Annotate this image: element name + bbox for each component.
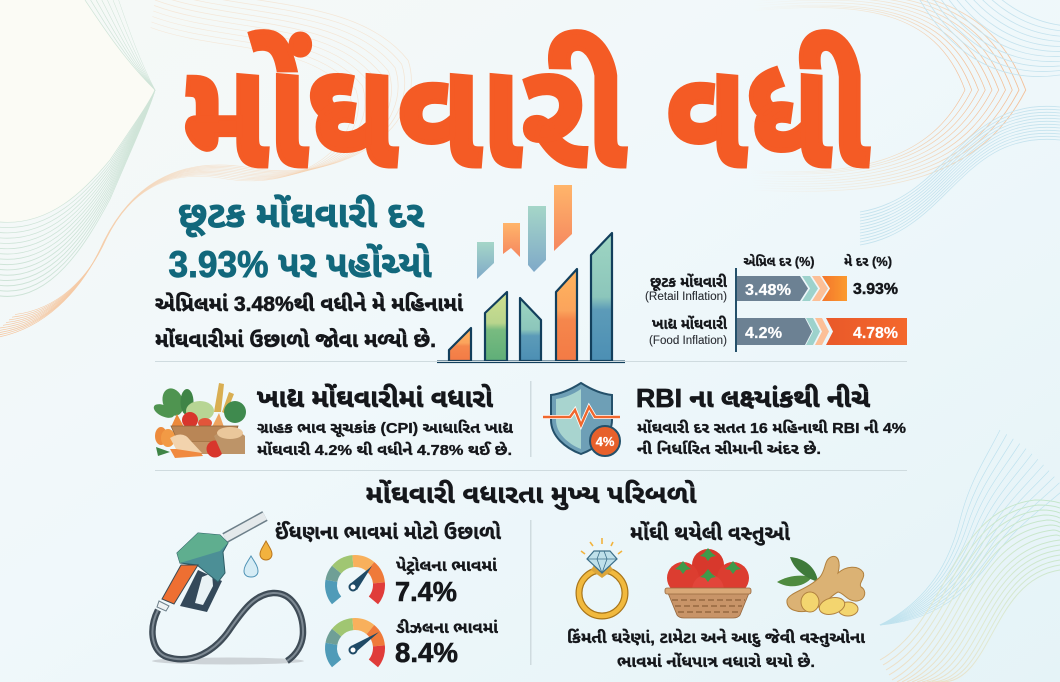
label: diesel xyxy=(395,619,499,668)
heading: retail inflation: છૂટક મોંઘવારી દર xyxy=(178,194,425,237)
text block: RBI target xyxy=(637,419,906,458)
text block: expensive goods xyxy=(567,628,865,671)
gauge: petrol xyxy=(331,561,379,600)
row label: food inflation xyxy=(649,315,728,347)
heading: main factors: મોંઘવારી વધારતા મુખ્ય પરિબળો xyxy=(366,479,697,510)
row bar: retail inflation: 3.48% xyxy=(745,282,791,299)
icon: fuel nozzle with hose xyxy=(152,516,304,664)
gauge: diesel xyxy=(331,624,379,663)
row bar: food inflation xyxy=(737,318,907,345)
row bar: food inflation: 4.78% xyxy=(853,325,898,342)
row label: food inflation: (Food Inflation) xyxy=(649,335,727,347)
row bar: retail inflation xyxy=(737,276,898,301)
text block: food inflation: ગ્રાહક ભાવ સૂચકાંક (CPI) આધારિત ખાદ્ય xyxy=(257,419,513,437)
heading: fuel price: ઈંધણના ભાવમાં મોટો ઉછાળો xyxy=(275,521,501,544)
heading: food inflation rising: ખાદ્ય મોંઘવારીમાં વધારો xyxy=(257,383,493,413)
text block: food inflation xyxy=(257,419,513,459)
text block: food inflation: મોંઘવારી 4.2% થી વધીને 4.78% થઈ છે. xyxy=(257,441,512,459)
icon: tomato basket xyxy=(665,548,751,618)
comparison chart: retail and food inflation xyxy=(645,253,907,352)
row label: retail inflation: છૂટક મોંઘવારી xyxy=(650,273,728,291)
row label: retail inflation xyxy=(645,273,728,303)
label: petrol: પેટ્રોલના ભાવમાં xyxy=(396,557,498,575)
text block: RBI target: ની નિર્ધારિત સીમાની અંદર છે. xyxy=(637,440,821,458)
column headers xyxy=(744,253,892,269)
title: મોંઘવારી xyxy=(182,30,626,198)
chart icon: rising bars and arrows xyxy=(437,185,625,363)
heading: retail inflation: 3.93% પર પહોંચ્યો xyxy=(168,243,432,285)
row label: retail inflation: (Retail Inflation) xyxy=(645,291,727,303)
text block: retail inflation description: એપ્રિલમાં 3.48%થી વધીને મે મહિનામાં xyxy=(155,291,464,316)
icon: shield with 4% badge: 4% xyxy=(596,434,615,449)
title: વધી xyxy=(666,30,869,198)
column headers: એપ્રિલ દર (%) xyxy=(744,254,814,269)
text block: retail inflation description xyxy=(155,291,464,352)
icon: ginger root xyxy=(777,556,865,617)
icon: shield with 4% badge xyxy=(543,383,620,456)
label: petrol xyxy=(395,557,498,607)
label: diesel: ડીઝલના ભાવમાં xyxy=(396,619,499,637)
icon: vegetable basket xyxy=(152,383,246,458)
label: petrol: 7.4% xyxy=(395,576,457,607)
heading: expensive goods: મોંઘી થયેલી વસ્તુઓ xyxy=(630,520,790,546)
text block: expensive goods: કિંમતી ઘરેણાં, ટામેટા અને આદુ જેવી વસ્તુઓના xyxy=(567,628,865,647)
column headers: મે દર (%) xyxy=(844,253,892,269)
heading: retail inflation xyxy=(168,194,432,285)
row bar: retail inflation: 3.93% xyxy=(853,281,898,298)
row bar: food inflation: 4.2% xyxy=(745,325,782,342)
heading: below RBI target: RBI ના લક્ષ્યાંકથી નીચે xyxy=(636,383,871,413)
label: diesel: 8.4% xyxy=(395,637,458,668)
text block: retail inflation description: મોંઘવારીમાં ઉછાળો જોવા મળ્યો છે. xyxy=(155,327,436,352)
text block: expensive goods: ભાવમાં નોંધપાત્ર વધારો થયો છે. xyxy=(617,652,815,671)
icon: diamond ring xyxy=(579,538,625,616)
text block: RBI target: મોંઘવારી દર સતત 16 મહિનાથી RBI ની 4% xyxy=(637,419,906,437)
row label: food inflation: ખાદ્ય મોંઘવારી xyxy=(652,315,728,333)
